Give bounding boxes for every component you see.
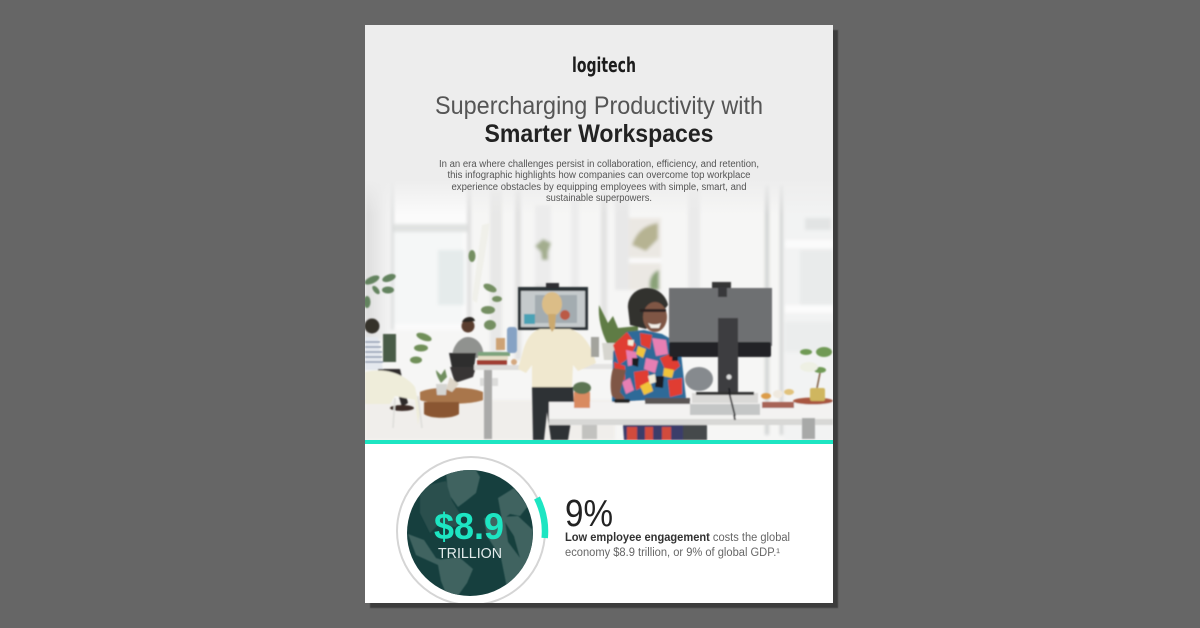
- coffee table: [420, 388, 483, 404]
- panel: document page: [363, 25, 833, 603]
- chair back: [685, 367, 713, 391]
- plant by chair: [383, 334, 396, 362]
- woman seated: [628, 288, 668, 329]
- small plant: [574, 392, 590, 408]
- globe value: TRILLION: [438, 545, 502, 562]
- intro text: this infographic highlights how companies can overcome top workplace: [448, 170, 751, 181]
- left person: [364, 318, 380, 334]
- header fade: [365, 165, 833, 215]
- stat description: economy $8.9 trillion, or 9% of global GDP.¹: [565, 547, 780, 559]
- title: [435, 92, 763, 148]
- middle plant: [468, 250, 502, 330]
- globe stat graphic: [397, 457, 545, 605]
- intro text: In an era where challenges persist in collaboration, efficiency, and retention,: [439, 159, 759, 170]
- man: [462, 320, 474, 332]
- desk 2: [549, 402, 833, 421]
- world map: [408, 467, 533, 601]
- woman standing: [518, 329, 596, 387]
- plant behind: [599, 305, 638, 344]
- intro text: sustainable superpowers.: [546, 193, 652, 204]
- accent stripe: [365, 440, 833, 444]
- books & bottle: [478, 352, 510, 356]
- logo: logitech: [572, 53, 636, 77]
- big monitor: [669, 288, 772, 346]
- title: Smarter Workspaces: [484, 120, 714, 148]
- title: Supercharging Productivity with: [435, 92, 763, 120]
- desk items: [762, 402, 794, 408]
- intro text: experience obstacles by equipping employees with simple, smart, and: [452, 182, 746, 193]
- stat description: Low employee engagement costs the global: [565, 532, 790, 544]
- globe value: $8.9: [434, 506, 504, 547]
- photo: office workspace: [363, 165, 833, 440]
- progress arc: [537, 498, 545, 538]
- desk 1: [474, 365, 522, 370]
- left plant: [363, 272, 397, 308]
- stat: 9%: 9%: [565, 493, 613, 535]
- stacked base: [692, 393, 758, 403]
- stat description: [565, 532, 790, 559]
- chair: [365, 370, 420, 425]
- intro text: [439, 159, 759, 204]
- page shadow: [370, 30, 838, 608]
- monitor: [518, 287, 588, 330]
